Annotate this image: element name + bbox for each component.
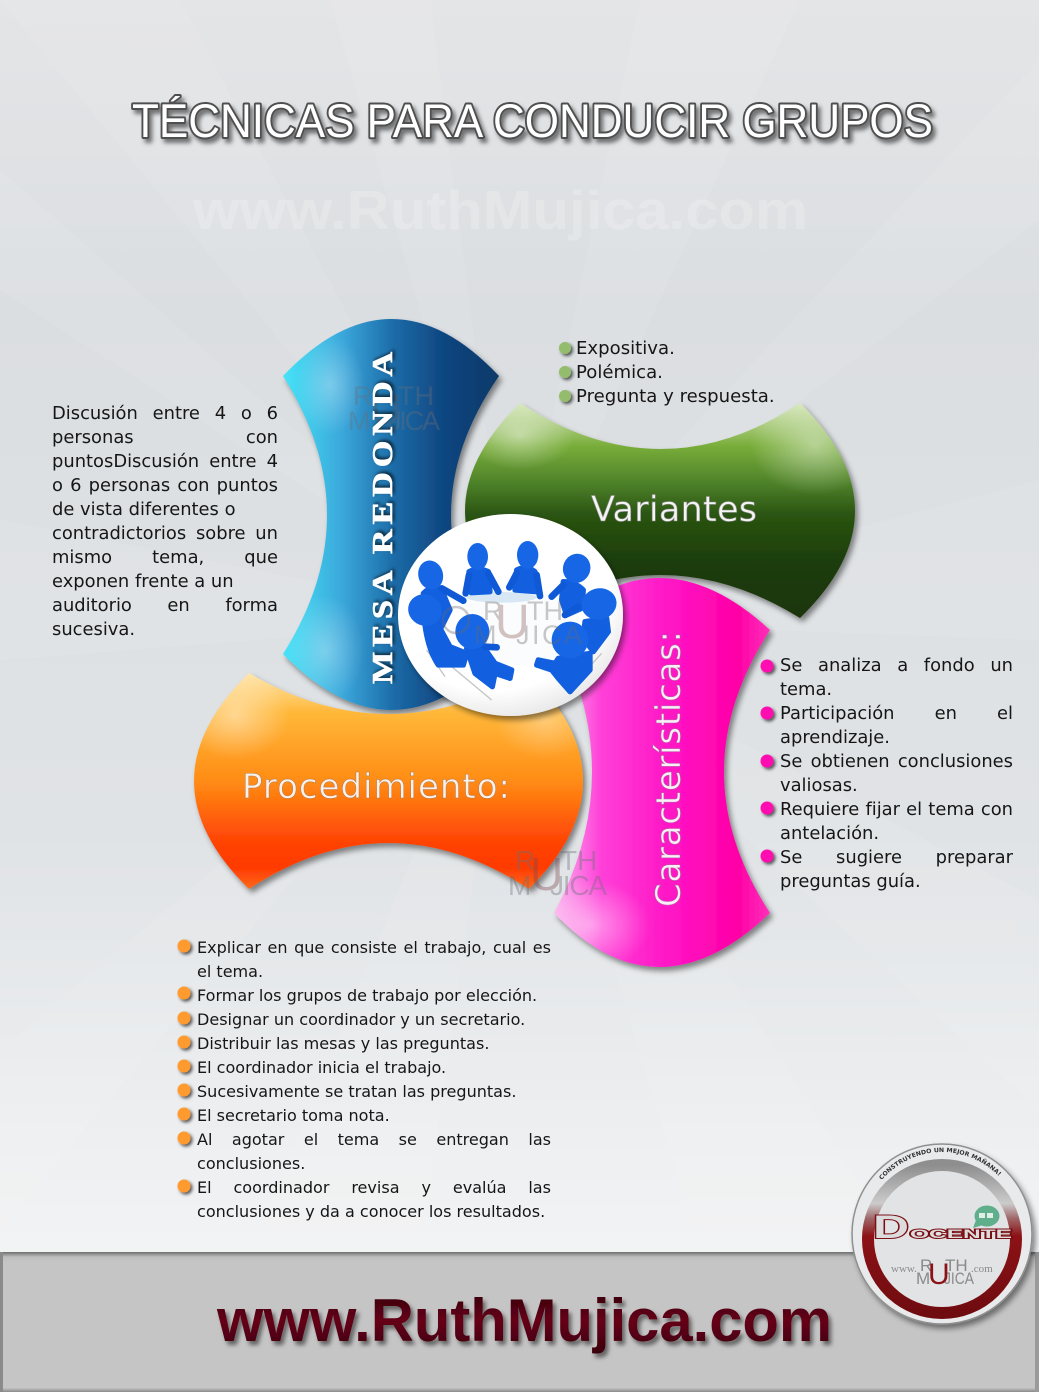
text: características list: Requiere fijar el tema con xyxy=(780,799,1013,820)
footer band xyxy=(0,1252,1039,1392)
heading: variantes: Variantes xyxy=(591,490,757,530)
text: procedimiento list: conclusiones. xyxy=(197,1154,305,1173)
watermark: ruth mujica on blue: R xyxy=(353,381,372,411)
badge url: www. xyxy=(891,1263,917,1275)
docente logo badge xyxy=(850,1143,1039,1332)
text: procedimiento list: Formar los grupos de trabajo por elección. xyxy=(197,986,537,1005)
bullets: procedimiento xyxy=(178,940,190,1192)
heading: características: Características: xyxy=(649,631,689,907)
text: variantes list: Expositiva. xyxy=(576,338,675,359)
watermark: ruth mujica on orange: JICA xyxy=(550,870,607,901)
text: variantes list: Pregunta y respuesta. xyxy=(576,386,775,407)
text: procedimiento list: el tema. xyxy=(197,962,263,981)
figures: torsos xyxy=(423,568,608,692)
heading: mesa redonda: MESA REDONDA xyxy=(368,347,399,684)
badge ruth mujica xyxy=(916,1256,975,1291)
text: procedimiento list: El coordinador revisa y evalúa las xyxy=(197,1178,551,1197)
watermark: ruth mujica on blue xyxy=(348,381,440,436)
text: procedimiento list: Explicar en que consiste el trabajo, cual es xyxy=(197,938,551,957)
text: características list: aprendizaje. xyxy=(780,727,890,748)
panel: variantes xyxy=(465,395,880,618)
text: variantes list xyxy=(576,338,775,407)
text: mesa redonda description: puntosDiscusión entre 4 xyxy=(52,451,278,472)
bullets: características xyxy=(760,660,774,862)
watermark: ruth mujica on circle xyxy=(443,596,582,650)
badge ruth mujica: TH xyxy=(945,1256,968,1275)
text: características list: Participación en el xyxy=(780,703,1013,724)
text: procedimiento list: Distribuir las mesas y las preguntas. xyxy=(197,1034,489,1053)
watermark: ruth mujica on orange: R xyxy=(515,845,535,876)
text: mesa redonda description: mismo tema, que xyxy=(52,547,278,568)
watermark: ruth mujica on blue: M xyxy=(348,406,370,436)
text: procedimiento list: conclusiones y da a conocer los resultados. xyxy=(197,1202,545,1221)
center circle with people around table xyxy=(398,514,623,716)
text: características list: tema. xyxy=(780,679,832,700)
panel: procedimiento xyxy=(180,670,607,901)
watermark: ruth mujica on circle: U xyxy=(495,596,530,649)
text: mesa redonda description: sucesiva. xyxy=(52,619,135,640)
docente wordmark: OCENTE xyxy=(910,1227,1012,1241)
docente wordmark xyxy=(873,1209,1012,1245)
icon: people at round table xyxy=(404,541,620,700)
watermark: ruth mujica on circle: JICA xyxy=(516,620,582,650)
heading: procedimiento: Procedimiento: xyxy=(242,767,510,807)
footer url: www.RuthMujica.com xyxy=(216,1287,832,1354)
text: mesa redonda description: contradictorios sobre un xyxy=(52,523,278,544)
figures: arms xyxy=(442,573,578,647)
text: mesa redonda description: o 6 personas con puntos xyxy=(52,475,278,496)
text: procedimiento list xyxy=(197,938,551,1221)
text: características list: Se sugiere preparar xyxy=(780,847,1013,868)
text: características list xyxy=(780,655,1013,892)
badge ruth mujica: JICA xyxy=(944,1269,975,1288)
icon: speech bubble xyxy=(973,1206,1000,1228)
text: procedimiento list: Al agotar el tema se entregan las xyxy=(197,1130,551,1149)
watermark: ruth mujica on blue: JICA xyxy=(388,406,440,436)
docente wordmark: D xyxy=(873,1209,909,1245)
panel: mesa redonda xyxy=(283,319,499,710)
watermark: ruth mujica on orange xyxy=(508,845,607,901)
text: características list: Se obtienen conclusiones xyxy=(780,751,1013,772)
text: características list: preguntas guía. xyxy=(780,871,921,892)
figures: heads xyxy=(404,541,620,658)
text: mesa redonda description: personas con xyxy=(52,427,278,448)
curved motto: CONSTRUYENDO UN MEJOR MAÑANA! xyxy=(879,1148,1002,1179)
badge url xyxy=(891,1263,993,1275)
watermark: ruth mujica on orange: M xyxy=(508,870,531,901)
text: procedimiento list: Designar un coordinador y un secretario. xyxy=(197,1010,525,1029)
badge ruth mujica: U xyxy=(928,1258,950,1291)
text: mesa redonda description: exponen frente a un xyxy=(52,571,234,592)
watermark: ruth mujica on circle: R xyxy=(483,596,502,626)
panel: características xyxy=(530,578,770,970)
text: características list: Se analiza a fondo un xyxy=(780,655,1013,676)
watermark: ruth mujica on orange: U xyxy=(530,848,563,900)
badge ruth mujica: R xyxy=(920,1256,932,1275)
text: mesa redonda description: de vista diferentes o xyxy=(52,499,236,520)
watermark: ruth mujica on blue: TH xyxy=(398,381,434,411)
bullets: variantes xyxy=(559,342,571,402)
text: mesa redonda description xyxy=(52,403,278,640)
text: procedimiento list: El secretario toma nota. xyxy=(197,1106,390,1125)
text: características list: valiosas. xyxy=(780,775,858,796)
watermark url: www.RuthMujica.com xyxy=(192,179,808,241)
text: variantes list: Polémica. xyxy=(576,362,663,383)
badge ruth mujica: M xyxy=(916,1269,930,1288)
text: procedimiento list: El coordinador inicia el trabajo. xyxy=(197,1058,446,1077)
text: procedimiento list: Sucesivamente se tratan las preguntas. xyxy=(197,1082,516,1101)
badge url: .com xyxy=(971,1263,993,1275)
watermark: ruth mujica on blue: U xyxy=(370,385,402,434)
text: mesa redonda description: Discusión entre 4 o 6 xyxy=(52,403,278,424)
title: TÉCNICAS PARA CONDUCIR GRUPOS xyxy=(132,94,933,147)
watermark: ruth mujica on circle: M xyxy=(474,620,496,650)
watermark: ruth mujica on circle: TH xyxy=(527,596,563,626)
text: características list: antelación. xyxy=(780,823,879,844)
watermark: ruth mujica on orange: TH xyxy=(560,845,597,876)
text: mesa redonda description: auditorio en forma xyxy=(52,595,278,616)
